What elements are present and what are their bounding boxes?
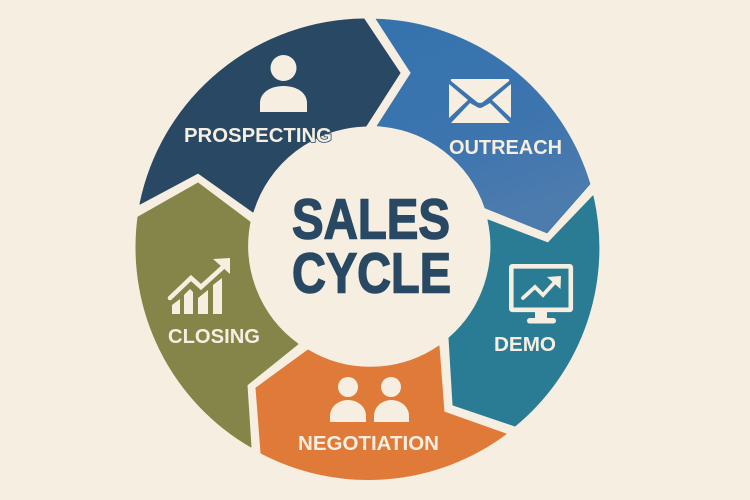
segment shape: negotiation xyxy=(256,346,506,479)
label: negotiation: NEGOTIATION xyxy=(298,432,439,455)
icon: two people xyxy=(330,377,409,422)
label: prospecting: PROSPECTING xyxy=(184,124,332,147)
title: SALES: SALES xyxy=(292,188,450,252)
segment shape: closing xyxy=(136,183,298,447)
segment shape: prospecting xyxy=(140,19,400,212)
label: demo: DEMO xyxy=(494,333,556,356)
label: closing: CLOSING xyxy=(168,325,260,348)
icon: monitor with chart xyxy=(511,266,571,324)
panel: prospecting xyxy=(140,19,400,212)
panel: demo xyxy=(449,196,599,426)
icon: growth chart xyxy=(170,258,230,314)
center hub xyxy=(250,127,490,367)
panel: closing xyxy=(136,183,298,447)
panel: negotiation xyxy=(256,346,506,479)
panel: outreach xyxy=(376,19,590,233)
segment shape: demo xyxy=(449,196,599,426)
icon: person xyxy=(260,55,307,112)
label: outreach: OUTREACH xyxy=(449,136,562,159)
icon: envelope xyxy=(449,79,511,123)
title: CYCLE: CYCLE xyxy=(292,242,451,306)
segment shape: outreach xyxy=(376,19,590,233)
